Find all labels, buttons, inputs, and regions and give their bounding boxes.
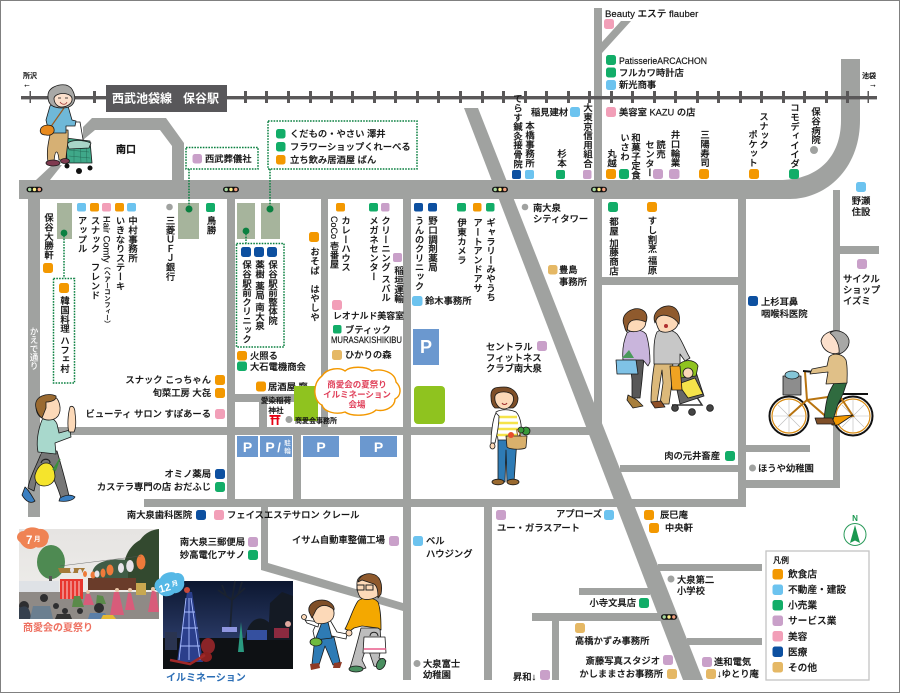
station name plate (106, 85, 227, 112)
icon: torii gate (270, 415, 280, 425)
parking row: P (243, 439, 252, 455)
label: 進和電気: 進和電気 (714, 656, 751, 667)
label: サイクルショップイズミ: ショップ (843, 285, 881, 295)
caption: summer festival: 商愛会の夏祭り (23, 621, 93, 634)
label: 愛染稲荷神社 (261, 395, 292, 415)
legend panel: 凡例 (773, 555, 789, 565)
label: 和菓子定食: 和菓子定食 (630, 133, 641, 180)
label: 大泉第二小学校: 大泉第二 (677, 574, 714, 585)
illustration: woman with basket (490, 387, 530, 485)
compass (844, 514, 866, 546)
label: サイクルショップイズミ: サイクル (843, 274, 880, 284)
direction: Ikebukuro: → (869, 80, 877, 89)
label: 愛染稲荷神社: 愛染稲荷 (261, 395, 292, 405)
legend panel: 不動産・建設 (788, 583, 846, 596)
label: 商愛会事務所: 商愛会事務所 (295, 416, 337, 425)
legend panel: 小売業 (788, 598, 817, 612)
illustration: man walking with shopping bag (22, 394, 76, 502)
label: 杉本 (556, 148, 567, 179)
parking row: 駐 (284, 438, 291, 447)
label: 読売センター (644, 139, 666, 179)
label: 稲見建材 (531, 106, 580, 118)
direction: Tokorozawa (23, 71, 37, 89)
label: ブティック MURASAKISHIKIBU: MURASAKISHIKIBU (331, 335, 402, 345)
parking: main block (413, 329, 439, 365)
label: 大泉富士幼稚園 (414, 658, 460, 680)
label: 大東京信用組合: 大東京信用組合 (582, 102, 593, 169)
label: 南大泉シティタワー: 南大泉 (533, 202, 562, 213)
label: 上杉耳鼻咽喉科医院: 咽喉科医院 (761, 308, 808, 319)
label: 稲垣運輸: 稲垣運輸 (393, 265, 404, 304)
label: 辰巳庵: 辰巳庵 (660, 509, 689, 520)
callout: 韓国料理 ハフェ村: 韓国料理 ハフェ村 (59, 295, 70, 374)
label: ユー・ガラスアート: ユー・ガラスアート (497, 522, 580, 533)
label: セントラルフィットネスクラブ南大泉 (486, 341, 547, 374)
label: 商愛会事務所 (286, 416, 337, 425)
label: Hair Comfy: Hair Comfy （ヘアーコンフィー） (102, 216, 112, 326)
traffic lights (26, 187, 677, 620)
parking row (237, 436, 397, 457)
parking: main block: P (420, 337, 432, 357)
station name plate: 西武池袋線 (112, 90, 172, 106)
label: 丸越 (606, 148, 617, 179)
direction: Ikebukuro: 池袋 (862, 71, 876, 80)
caption: illumination: イルミネーション (166, 672, 246, 684)
label: スナック フレンド: スナック フレンド (90, 216, 100, 300)
label: カステラ専門の店 おだふじ: カステラ専門の店 おだふじ (97, 481, 211, 492)
callout: event venue cloud: イルミネーション (323, 390, 391, 400)
label: てらす鍼灸接骨院: てらす鍼灸接骨院 (512, 94, 523, 169)
label: 井口輪業: 井口輪業 (670, 129, 680, 168)
label: Beauty エステ flauber: Beauty エステ flauber (605, 9, 699, 20)
label: 中央軒 (649, 522, 693, 533)
label: かえで通り: かえで通り (29, 327, 39, 370)
callout: clinic group: 保谷駅前クリニック (241, 259, 252, 344)
label: 丸越: 丸越 (606, 148, 617, 168)
parking row: P (374, 439, 383, 455)
badge: July: 月 (34, 535, 40, 543)
label: 南大泉歯科医院: 南大泉歯科医院 (127, 509, 192, 520)
label: 火照る (237, 351, 278, 361)
label: 稲見建材: 稲見建材 (531, 106, 568, 118)
label: 豊島事務所 (548, 264, 587, 287)
label: イサム自動車整備工場: イサム自動車整備工場 (292, 534, 385, 545)
label: 大泉富士幼稚園: 大泉富士 (423, 658, 460, 669)
illustration: young couple with stroller (616, 306, 713, 415)
label: 都屋 加藤商店: 都屋 加藤商店 (608, 216, 619, 276)
illustration: parent and child (302, 574, 387, 672)
callout: 西武葬儀社: 西武葬儀社 (205, 153, 252, 164)
label: 野瀬住設 (852, 182, 871, 217)
label: アートアンドアサ: アートアンドアサ (472, 218, 483, 292)
label: 小寺文具店: 小寺文具店 (590, 597, 636, 608)
label: サイクルショップイズミ: イズミ (843, 295, 871, 306)
label: いさわ: いさわ (619, 133, 630, 161)
label: アップル (76, 203, 87, 253)
legend panel: その他 (788, 661, 817, 674)
label: 高橋かずみ事務所: 高橋かずみ事務所 (575, 635, 649, 646)
label: 昇和 (513, 670, 550, 682)
label: 杉本: 杉本 (556, 148, 567, 168)
label: 新光商事 (606, 79, 656, 90)
label: ベル ハウジング: ベル (426, 536, 445, 546)
label: コモディイイダ: コモディイイダ (789, 103, 800, 168)
label: 鳥勝 (206, 203, 216, 235)
label: すし割烹 福原: すし割烹 福原 (646, 216, 657, 274)
label: 南大泉三郵便局: 南大泉三郵便局 (180, 536, 245, 547)
label: 読売センター: センター (644, 140, 655, 177)
legend panel: サービス業 (788, 614, 837, 627)
label: フェイスエステサロン クレール: フェイスエステサロン クレール (227, 510, 359, 520)
south exit label: 南口 (116, 143, 136, 156)
label: 旬菜工房 大㐂: 旬菜工房 大㐂 (153, 387, 211, 398)
label: 昇和: 昇和↓ (513, 672, 536, 682)
label: 妙高電化アサノ: 妙高電化アサノ (180, 549, 245, 560)
label: 三菱UFJ銀行: 三菱ＵＦＪ銀行 (164, 216, 175, 282)
callout: clinic group: 保谷駅前整体院 (267, 259, 278, 326)
legend panel: 医療 (788, 646, 808, 658)
label: 大石電機商会: 大石電機商会 (250, 361, 306, 372)
label: クリーニング スバル: クリーニング スバル (380, 216, 391, 302)
label: 大泉第二小学校: 小学校 (677, 585, 706, 596)
parking row: P (265, 439, 275, 455)
label: 愛染稲荷神社: 神社 (268, 405, 284, 415)
label: ベル ハウジング (413, 536, 472, 559)
callout: fruit, flower and bar shops: 立ち飲み居酒屋 ばん (290, 154, 376, 165)
label: 南大泉シティタワー (522, 202, 588, 224)
label: 居酒屋 齊 (256, 381, 308, 392)
label: 大泉富士幼稚園: 幼稚園 (423, 669, 451, 680)
label: 井口輪業 (669, 129, 680, 179)
photo: winter illumination (163, 581, 293, 669)
direction: Tokorozawa: ← (23, 80, 31, 89)
badge: December: 月 (171, 579, 179, 588)
label: 火照る: 火照る (250, 351, 278, 361)
label: 大泉第二小学校 (668, 574, 714, 596)
badge: December: 12 (158, 581, 172, 596)
label: セントラルフィットネスクラブ南大泉: クラブ南大泉 (486, 362, 542, 374)
label: ユー・ガラスアート (496, 510, 580, 533)
label: 居酒屋 齊: 居酒屋 齊 (268, 381, 308, 392)
label: 鳥勝: 鳥勝 (206, 215, 216, 235)
label: 保谷大勝軒: 保谷大勝軒 (43, 212, 54, 260)
park: event venue (294, 386, 318, 421)
label: 上杉耳鼻咽喉科医院 (748, 296, 808, 319)
label: ひかりの森: ひかりの森 (345, 349, 392, 360)
label: 保谷病院: 保谷病院 (810, 106, 821, 145)
label: 本橋事務所: 本橋事務所 (524, 120, 535, 168)
label: サイクルショップイズミ (843, 259, 881, 306)
photo: summer festival (19, 529, 159, 619)
station-side buildings (57, 203, 280, 239)
label: カレーハウス CoCo壱番屋: CoCo 壱番屋 (329, 216, 339, 269)
label: ビューティ サロン すぽあーる: ビューティ サロン すぽあーる (86, 408, 211, 419)
label: カレーハウス CoCo壱番屋 (329, 203, 351, 272)
label: 南大泉シティタワー: シティタワー (533, 213, 588, 224)
callout: fruit, flower and bar shops (266, 121, 417, 212)
label: PatisserieARCACHON: PatisserieARCACHON (619, 56, 707, 66)
label: スナック ポケット: ポケット (747, 130, 758, 167)
callout: 西武葬儀社 (186, 148, 258, 212)
station name plate: 保谷駅 (183, 92, 219, 106)
illustration: cyclist (770, 331, 872, 436)
label: レオナルド美容室: レオナルド美容室 (333, 310, 404, 321)
label: 中央軒: 中央軒 (665, 522, 693, 533)
label: おそば はやしや: おそば はやしや (309, 247, 320, 321)
legend panel: 美容 (788, 630, 808, 643)
label: ブティック MURASAKISHIKIBU (331, 324, 402, 345)
label: 野瀬住設: 野瀬 (852, 195, 871, 206)
label: ほうや幼稚園: ほうや幼稚園 (758, 462, 814, 474)
legend panel (766, 551, 869, 680)
callout: fruit, flower and bar shops: フラワーショップくれーべる (290, 142, 411, 152)
label: 上杉耳鼻咽喉科医院: 上杉耳鼻 (761, 296, 798, 307)
parking row: / (277, 440, 281, 455)
label: オミノ薬局: オミノ薬局 (164, 468, 211, 479)
label: 稲垣運輸 (393, 253, 404, 304)
legend panel: 飲食店 (788, 568, 817, 580)
label: 斎藤写真スタジオ: 斎藤写真スタジオ (586, 655, 660, 666)
label: 三陽寿司: 三陽寿司 (699, 130, 710, 168)
parking row: 輪 (284, 446, 291, 455)
label: ブティック MURASAKISHIKIBU: ブティック (345, 324, 391, 335)
label: 豊島事務所: 豊島 (559, 264, 578, 275)
label: スナック ポケット: スナック (758, 112, 769, 149)
label: スナック ポケット (747, 112, 769, 179)
label: 読売センター: 読売 (655, 139, 666, 159)
railway line (21, 91, 877, 103)
badge: December (152, 569, 188, 599)
label: うんのクリニック: うんのクリニック (414, 216, 424, 290)
badge: July: 7 (26, 535, 32, 547)
label: レオナルド美容室 (332, 300, 404, 321)
direction: Ikebukuro (862, 71, 877, 89)
callout: clinic group: 薬樹 薬局 南大泉 (254, 259, 265, 330)
label: ベル ハウジング: ハウジング (426, 548, 472, 559)
label: 進和電気 (702, 656, 751, 667)
compass: N (852, 514, 858, 523)
label: カレーハウス CoCo壱番屋: カレーハウス (340, 216, 351, 272)
label: アップル: アップル (76, 216, 87, 253)
label: いきなりステーキ: いきなりステーキ (114, 216, 125, 290)
label: 豊島事務所: 事務所 (559, 276, 587, 287)
label: 伊東カメラ: 伊東カメラ (456, 217, 467, 264)
label: ゆとり庵: ↓ゆとり庵 (717, 668, 760, 679)
callout: 韓国料理 ハフェ村 (54, 230, 74, 383)
callout: event venue cloud (315, 367, 400, 415)
label: オミノ薬局 (164, 468, 225, 479)
label: ギャラリーみやうち: ギャラリーみやうち (485, 218, 496, 303)
callout: event venue cloud: 商愛会の夏祭り (327, 380, 387, 390)
label: 美容室 KAZU の店: 美容室 KAZU の店 (619, 106, 695, 118)
badge: July (17, 527, 49, 549)
label: メガネセンター: メガネセンター (368, 216, 379, 281)
parking row: P (316, 439, 326, 455)
label: 野瀬住設: 住設 (852, 206, 871, 217)
label: 辰巳庵 (644, 509, 689, 520)
label: 野口調剤薬局: 野口調剤薬局 (427, 216, 438, 273)
label: 高橋かずみ事務所 (575, 623, 649, 646)
label: いさわ (619, 133, 630, 179)
label: セントラルフィットネスクラブ南大泉: フィットネス (486, 353, 542, 363)
callout: clinic group (236, 228, 284, 347)
label: 中村事務所: 中村事務所 (127, 215, 138, 263)
callout: fruit, flower and bar shops: くだもの・やさい 澤井 (290, 128, 386, 139)
label: フルカワ時計店: フルカワ時計店 (619, 67, 684, 78)
label: かしままさお事務所: かしままさお事務所 (579, 668, 663, 679)
direction: Tokorozawa: 所沢 (23, 71, 37, 80)
callout: event venue cloud: 会場 (348, 400, 366, 410)
label: 鈴木事務所: 鈴木事務所 (425, 295, 472, 306)
label: アプローズ (556, 508, 614, 520)
park: green square (414, 386, 445, 424)
label: 新光商事: 新光商事 (619, 79, 656, 90)
label: アプローズ: アプローズ (556, 508, 602, 519)
label: 肉の元井畜産: 肉の元井畜産 (664, 450, 720, 461)
label: セントラルフィットネスクラブ南大泉: セントラル (486, 342, 532, 352)
label: Beauty エステ flauber (604, 9, 699, 29)
illustration: elderly woman with walker (40, 85, 92, 174)
label: スナック こっちゃん: スナック こっちゃん (125, 375, 211, 385)
